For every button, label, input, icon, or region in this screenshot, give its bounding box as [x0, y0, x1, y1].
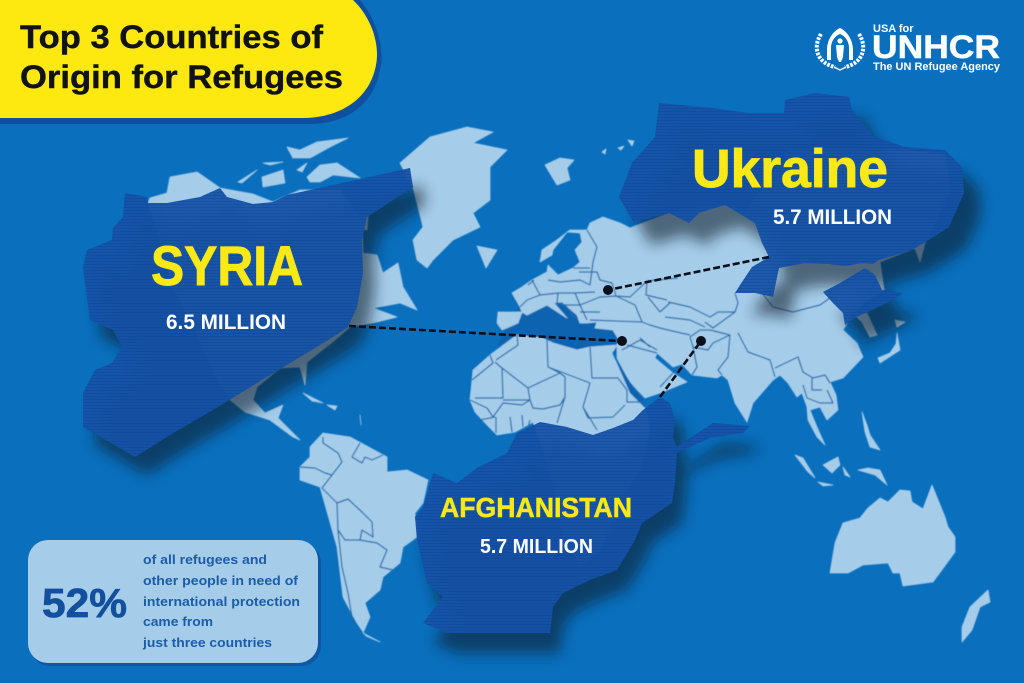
logo: USA for UNHCR: The UN Refugee Agency: [873, 61, 1001, 73]
banner background: [0, 0, 377, 118]
title banner: [0, 0, 382, 124]
land: Greenland: [400, 127, 507, 268]
callout text: came from: [143, 614, 213, 629]
icon: UNHCR emblem: [817, 28, 863, 70]
callout text: [142, 552, 300, 650]
arrow: Afghanistan connector: [660, 341, 701, 397]
callout text: international protection: [143, 594, 300, 609]
heading: Top 3 Countries of: [20, 19, 323, 55]
panel: Afghanistan: [415, 397, 750, 633]
label: Ukraine: Ukraine: [692, 139, 888, 199]
land: Korea and Japan: [853, 313, 905, 363]
marker: Afghanistan location: [696, 336, 706, 346]
land: Southeast Asian islands: [795, 412, 887, 486]
heading: Origin for Refugees: [20, 59, 343, 95]
land: New Zealand: [962, 590, 990, 642]
world map: [148, 127, 990, 642]
panel: Syria: [83, 168, 413, 457]
country borders: [470, 230, 833, 433]
land: South America: [300, 433, 428, 642]
callout background: [28, 540, 318, 663]
land: Eurasia: [497, 150, 950, 445]
logo text: USA for: [873, 23, 914, 35]
land: Africa: [470, 335, 650, 565]
callout text: of all refugees and: [143, 552, 267, 567]
callout text: just three countries: [142, 635, 272, 650]
connector lines and dots: [349, 257, 769, 397]
stat: 52%: 52%: [42, 580, 127, 626]
panel: Ukraine: [619, 93, 964, 325]
callout shadow: [30, 543, 321, 666]
enlarged country shadows: [95, 115, 981, 653]
country shape: Syria: [83, 168, 413, 457]
logo: USA for UNHCR: [817, 23, 1001, 73]
Mediterranean Sea: [497, 298, 640, 358]
marker: Ukraine location: [603, 285, 613, 295]
callout text: other people in need of: [143, 573, 299, 588]
banner shadow: [0, 0, 382, 124]
Red Sea: [612, 353, 645, 408]
panel: 52% callout: [28, 540, 321, 666]
figure: Afghanistan 5.7 million: 5.7 MILLION: [480, 536, 593, 558]
arrow: Ukraine connector: [608, 257, 769, 290]
figure: 6.5 million: 6.5 MILLION: [166, 311, 286, 334]
country shape: Ukraine: [619, 93, 964, 325]
land: Iceland and Arctic islands: [545, 140, 634, 185]
country shape: Afghanistan: [415, 397, 750, 633]
figure: Ukraine 5.7 million: 5.7 MILLION: [773, 206, 892, 229]
land: Australia: [830, 485, 955, 586]
label: SYRIA: SYRIA: [151, 234, 303, 297]
logo: USA for UNHCR: UNHCR: [872, 29, 1000, 65]
arrow: Syria connector: [349, 326, 620, 341]
marker: Syria location: [617, 336, 627, 346]
land: North America: [148, 138, 417, 440]
heading: [20, 19, 343, 95]
land: South America borders: [300, 437, 393, 623]
label: AFGHANISTAN: AFGHANISTAN: [440, 492, 632, 523]
